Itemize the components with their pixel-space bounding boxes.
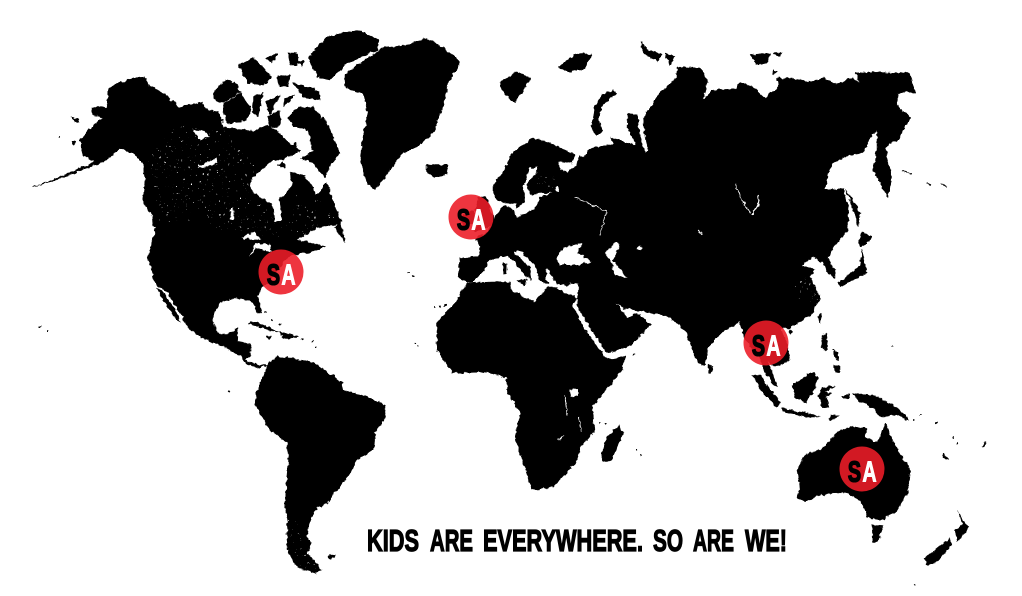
Baltic Sea <box>513 167 553 218</box>
letter S: S <box>267 260 280 292</box>
Greenland <box>345 38 460 190</box>
Svalbard, Franz Josef Land and Novaya Zemlya <box>500 53 616 135</box>
New Zealand <box>925 510 969 565</box>
coastal and lake speckle: Finland <box>537 176 555 188</box>
Black Sea <box>556 243 592 265</box>
coastal and lake speckle: Quebec <box>286 196 334 234</box>
Gulf of St Lawrence <box>297 224 337 240</box>
location badge: Thailand <box>744 320 788 366</box>
Madagascar <box>602 425 623 461</box>
Lake Winnipeg <box>231 208 233 220</box>
Canadian Arctic islands <box>213 30 380 178</box>
Aral Sea <box>636 245 642 251</box>
letter S: S <box>848 457 861 489</box>
Kuril Islands <box>903 171 947 186</box>
Siberian Arctic islands <box>641 42 783 74</box>
tagline: ARE <box>430 523 473 558</box>
Caribbean islands <box>248 311 317 348</box>
tagline <box>367 523 787 558</box>
letter A: A <box>862 457 877 489</box>
Caspian Sea <box>605 243 627 278</box>
letter S: S <box>457 205 470 237</box>
Central Asian rivers <box>575 183 750 235</box>
letter S: S <box>752 331 765 363</box>
Pacific islands <box>39 326 986 585</box>
rivers and lake detail <box>232 183 759 440</box>
Mediterranean islands <box>503 263 571 290</box>
location badge: United States <box>258 250 304 294</box>
location badge: United Kingdom <box>448 194 494 240</box>
Lake Victoria <box>570 389 578 397</box>
letter A: A <box>471 205 486 237</box>
letter A: A <box>281 260 296 292</box>
Tasmania <box>872 525 883 542</box>
British Isles <box>462 197 496 232</box>
tagline: KIDS <box>367 523 419 558</box>
letter A: A <box>766 331 781 363</box>
South America <box>255 357 385 573</box>
coastal and lake speckle: China <box>795 278 818 304</box>
Aleutian Islands <box>33 146 120 187</box>
Lake Ladoga <box>554 186 560 192</box>
Skagerrak <box>490 198 516 211</box>
Southeast Asia islands <box>708 333 910 421</box>
inland seas and lakes <box>193 130 642 397</box>
Australia <box>797 423 910 520</box>
Kodiak and Bering islands <box>59 117 79 145</box>
coastal and lake speckle: Patagonia <box>288 520 316 569</box>
coastal and lake speckle: Canada <box>148 126 282 237</box>
tagline: SO <box>653 523 683 558</box>
Lake Baikal <box>752 195 759 214</box>
tagline: ARE <box>693 523 734 558</box>
Africa <box>437 282 625 490</box>
tagline: WE! <box>745 523 787 558</box>
Atlantic and Indian Ocean islands <box>408 272 642 456</box>
Great Lakes <box>242 232 272 257</box>
tagline: EVERYWHERE. <box>483 523 643 558</box>
Iceland <box>427 165 448 177</box>
Eurasia <box>458 67 915 387</box>
location badge: Australia <box>840 446 884 492</box>
Baja California <box>157 288 181 323</box>
African lakes and rivers <box>558 396 581 440</box>
North America <box>80 77 345 368</box>
Sakhalin and Japan <box>788 188 872 334</box>
Falkland Islands <box>328 554 335 559</box>
Great Bear and Great Slave lakes <box>193 130 218 168</box>
